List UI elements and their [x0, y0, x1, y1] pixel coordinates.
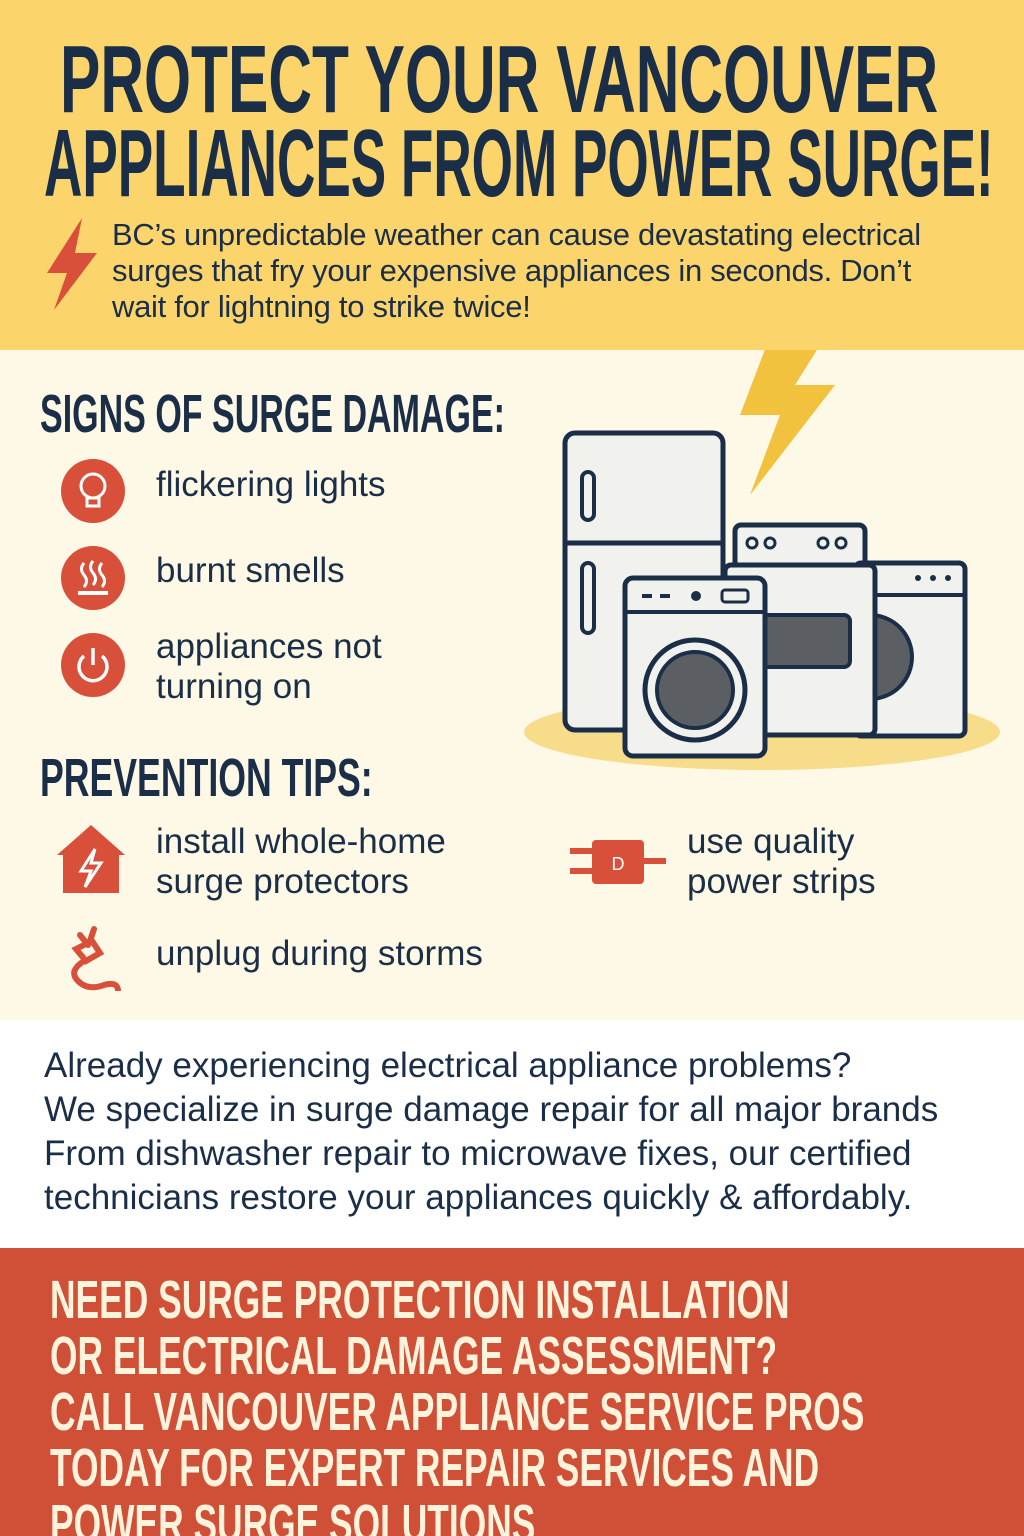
tip: power strips: power strips — [687, 862, 876, 901]
text block: repair info: technicians restore your appliances quickly & affordably. — [44, 1178, 912, 1217]
title: APPLIANCES FROM POWER SURGE! — [44, 110, 994, 217]
list: signs: turning on — [156, 667, 312, 706]
list: signs: burnt smells — [156, 551, 345, 590]
icon: smell — [61, 546, 125, 610]
tip: power strips — [570, 822, 876, 901]
text block: repair info — [44, 1046, 938, 1217]
icon: power — [61, 633, 125, 697]
list: signs: flickering lights — [156, 465, 386, 504]
icon: plug — [570, 840, 666, 884]
icon: cord — [71, 926, 121, 991]
icon: lightning — [47, 218, 97, 310]
tip: unplug: unplug during storms — [156, 934, 483, 973]
title: PROTECT YOUR VANCOUVER — [60, 26, 938, 133]
intro text: surges that fry your expensive appliances in seconds. Don’t — [112, 253, 911, 288]
intro text: BC’s unpredictable weather can cause devastating electrical — [112, 217, 921, 252]
icon: bulb — [61, 459, 125, 523]
cta text: TODAY FOR EXPERT REPAIR SERVICES AND — [50, 1438, 819, 1498]
illustration: appliances — [524, 350, 1000, 770]
text block: repair info: Already experiencing electrical appliance problems? — [44, 1046, 851, 1085]
header panel — [0, 0, 1024, 350]
heading: signs: SIGNS OF SURGE DAMAGE: — [40, 384, 505, 444]
text block: repair info: From dishwasher repair to microwave fixes, our certified — [44, 1134, 912, 1173]
intro text — [112, 217, 921, 324]
panel: cream main — [0, 350, 1024, 1020]
tip: whole-home: surge protectors — [156, 862, 409, 901]
list: signs — [61, 459, 386, 706]
cta text — [50, 1270, 864, 1536]
tip: power strips: use quality — [687, 822, 854, 861]
icon: house — [57, 825, 125, 893]
tip: whole-home: install whole-home — [156, 822, 446, 861]
cta text: OR ELECTRICAL DAMAGE ASSESSMENT? — [50, 1326, 777, 1386]
text block: repair info: We specialize in surge damage repair for all major brands — [44, 1090, 938, 1129]
tip: unplug — [71, 926, 483, 991]
tip: whole-home — [57, 822, 446, 901]
list: signs: appliances not — [156, 627, 382, 666]
icon: plug: D — [612, 854, 624, 874]
heading: prevention: PREVENTION TIPS: — [40, 748, 373, 808]
panel: call to action — [0, 1248, 1024, 1536]
cta text: CALL VANCOUVER APPLIANCE SERVICE PROS — [50, 1382, 864, 1442]
intro text: wait for lightning to strike twice! — [112, 289, 531, 324]
title — [44, 26, 994, 217]
cta text: NEED SURGE PROTECTION INSTALLATION — [50, 1270, 790, 1330]
